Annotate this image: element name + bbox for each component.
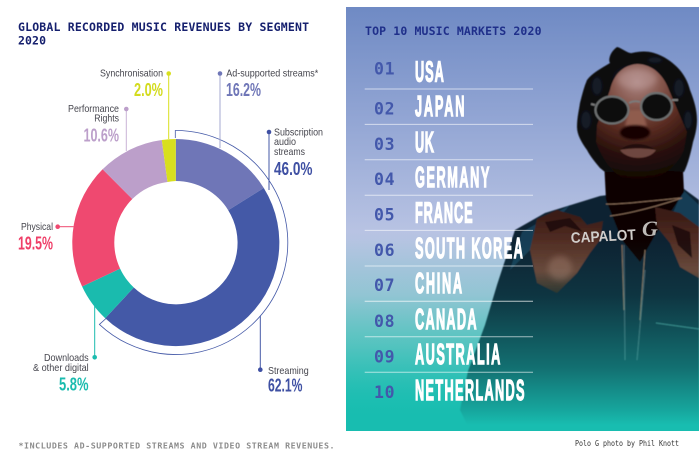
necklace chain [606, 198, 682, 320]
row 09 [365, 338, 533, 372]
row 05 [365, 197, 533, 230]
row 06 [365, 232, 533, 266]
chart title: GLOBAL RECORDED MUSIC REVENUES BY SEGMENT [18, 20, 309, 34]
left hand [530, 210, 603, 293]
panel background [346, 7, 699, 431]
figure artwork [460, 47, 699, 431]
segment: performance rights [103, 140, 168, 199]
callout: performance rights [68, 104, 129, 151]
row 07: CHINA [415, 267, 462, 300]
callout: downloads and other digital: & other digital [33, 363, 89, 374]
forehead highlight [617, 69, 657, 89]
lips [620, 144, 656, 158]
callout: performance rights: Rights [94, 114, 119, 124]
jacket highlight shoulder [510, 190, 699, 270]
callout: synchronisation: Synchronisation [100, 68, 163, 80]
jacket pocket zip [656, 323, 699, 329]
callout: subscription audio streams: Subscription [274, 127, 323, 138]
row 03 [365, 126, 533, 160]
callout: downloads and other digital: 5.8% [59, 374, 88, 394]
row 06: SOUTH KOREA [415, 232, 523, 265]
row 01: 01 [374, 60, 395, 79]
row 01: USA [415, 56, 444, 88]
segment: subscription audio streams [105, 188, 279, 346]
callout: ad-supported streams: Ad-supported streams* [226, 68, 318, 80]
left hand fingers shadow [545, 218, 583, 232]
callout: synchronisation [100, 68, 171, 139]
neck [604, 170, 685, 262]
donut chart [72, 139, 279, 346]
row 08: CANADA [415, 303, 477, 335]
callout: physical [18, 222, 74, 254]
pendant G: G [642, 216, 658, 241]
row 07: 07 [374, 276, 394, 295]
callout: downloads and other digital: Downloads [44, 353, 89, 364]
callout: downloads and other digital [33, 306, 97, 394]
callout: subscription audio streams: audio [274, 137, 296, 148]
row 02: JAPAN [415, 90, 464, 123]
chart title: 2020 [18, 34, 46, 48]
row 04: GERMANY [415, 161, 489, 194]
hair strand texture [581, 57, 692, 129]
photo illustration: artist [346, 47, 699, 431]
row 10: 10 [374, 383, 394, 402]
callout: subscription audio streams [267, 127, 323, 190]
row 06: 06 [374, 241, 395, 260]
fade overlay [346, 260, 699, 431]
row 08 [365, 303, 533, 337]
callout: performance rights: Performance [68, 104, 119, 115]
segment: downloads and other digital [82, 269, 134, 318]
callout: ad-supported streams [218, 68, 318, 148]
callout: streaming: Streaming [268, 366, 309, 377]
row 03: 03 [374, 135, 394, 154]
row 01 [365, 56, 533, 89]
callout: physical: 19.5% [18, 232, 53, 254]
callout: synchronisation: 2.0% [134, 79, 163, 100]
row 08: 08 [374, 312, 394, 331]
row 02 [365, 90, 533, 124]
right hand [655, 207, 699, 278]
row 09: AUSTRALIA [415, 338, 500, 371]
pendant lettering: CAPALOT [570, 227, 636, 247]
ranking list [365, 56, 533, 406]
photo credit: Polo G photo by Phil Knott [575, 439, 679, 448]
panel: top 10 music markets [346, 7, 699, 431]
segment: physical [72, 169, 132, 286]
right hand shadow [672, 225, 692, 258]
jacket zipper [624, 245, 645, 360]
streaming bracket arc [99, 130, 288, 354]
row 09: 09 [374, 347, 394, 366]
row 04: 04 [374, 170, 395, 189]
hair [577, 47, 697, 172]
row 02: 02 [374, 99, 394, 118]
row 03: UK [415, 126, 434, 158]
callout: streaming: 62.1% [268, 374, 302, 396]
panel heading: TOP 10 MUSIC MARKETS 2020 [365, 24, 542, 38]
nostril shadow [620, 126, 650, 140]
callout: streaming [258, 316, 309, 396]
segment: ad-supported streams [176, 139, 264, 210]
footnote: *INCLUDES AD-SUPPORTED STREAMS AND VIDEO STREAM REVENUES. [18, 440, 334, 450]
sunglasses [591, 93, 678, 124]
chart title [18, 20, 309, 48]
left palm highlight [548, 256, 572, 280]
callout: subscription audio streams: 46.0% [274, 158, 312, 179]
row 04 [365, 161, 533, 195]
row 07 [365, 267, 533, 301]
row 10: NETHERLANDS [415, 374, 525, 406]
row 05: FRANCE [415, 197, 473, 229]
callout: ad-supported streams: 16.2% [226, 79, 261, 100]
nose bridge [625, 110, 647, 126]
row 05: 05 [374, 206, 394, 225]
callout: physical: Physical [21, 222, 53, 233]
jacket [460, 186, 699, 431]
face [596, 64, 687, 183]
segment: synchronisation [162, 139, 176, 182]
callout: subscription audio streams: streams [274, 147, 305, 158]
callout: performance rights: 10.6% [84, 124, 119, 146]
